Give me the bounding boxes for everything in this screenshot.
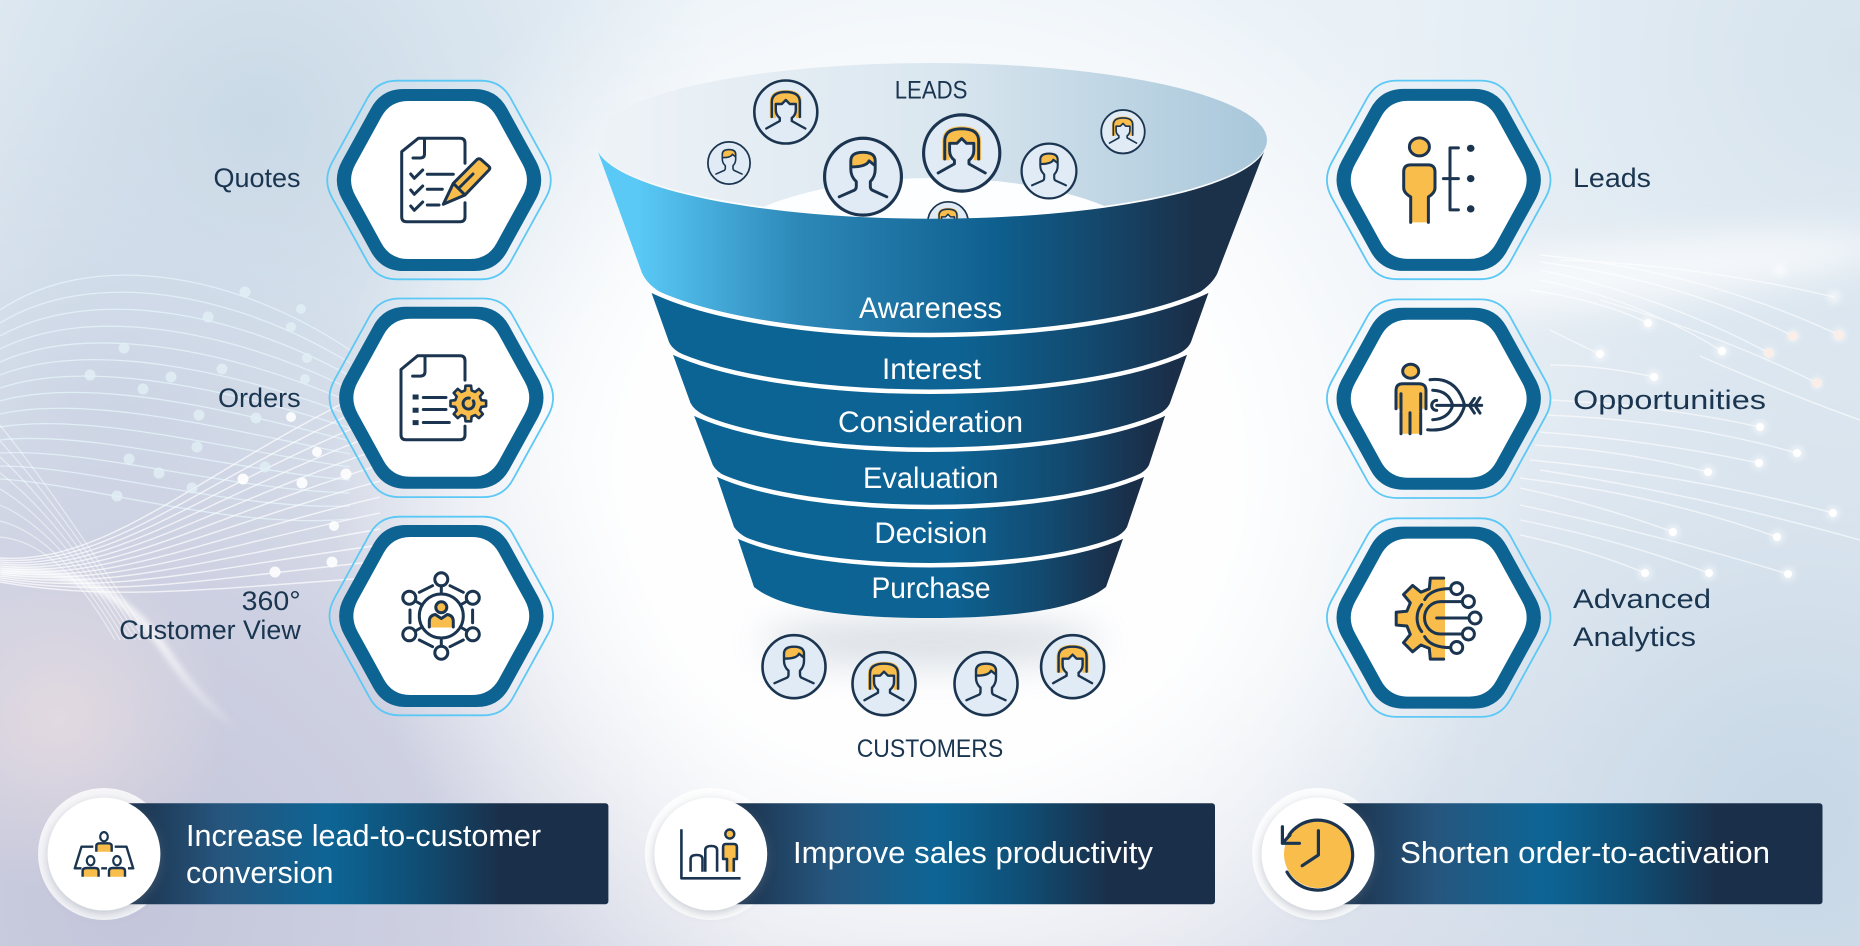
icon: gear with circuit	[1396, 578, 1481, 659]
label: 360 customer view	[119, 586, 301, 645]
customer avatars	[762, 635, 1104, 715]
label: Orders: Orders	[218, 383, 301, 413]
callout text	[186, 818, 541, 890]
label: Leads: Leads	[1573, 163, 1651, 193]
stage labels: Interest	[882, 353, 982, 386]
funnel band: evaluation	[693, 413, 1166, 508]
funnel band: decision	[716, 474, 1145, 566]
stage labels: Purchase	[872, 572, 990, 605]
icon: person with target	[1396, 364, 1482, 434]
callout: sales productivity	[645, 788, 1215, 920]
funnel band: consideration	[672, 352, 1188, 451]
callout text: Increase lead-to-customer	[186, 818, 541, 853]
icon: team at table	[75, 832, 133, 877]
icon: document with pencil	[402, 138, 490, 222]
lead avatars	[708, 80, 1145, 242]
label: Advanced Analytics: Analytics	[1573, 622, 1696, 652]
hexagon: 360 customer view	[330, 517, 553, 715]
stage labels: Decision	[874, 517, 987, 550]
callout text: Improve sales productivity	[793, 835, 1153, 870]
callout text: conversion	[186, 855, 334, 890]
funnel inner opening	[710, 178, 1160, 342]
funnel band: interest	[650, 290, 1210, 392]
label: 360 customer view: 360°	[242, 586, 301, 616]
icon: chart with person	[681, 829, 741, 878]
icon: person with list	[1404, 138, 1474, 222]
customers heading: CUSTOMERS	[857, 735, 1003, 763]
icon: customer network	[403, 573, 479, 659]
label: Advanced Analytics: Advanced	[1573, 584, 1711, 614]
icon: document with gear	[401, 356, 486, 440]
stage labels: Awareness	[859, 292, 1002, 325]
label: Opportunities: Opportunities	[1573, 385, 1766, 415]
leads heading: LEADS	[895, 77, 968, 105]
label: Quotes: Quotes	[214, 163, 300, 193]
callout: lead conversion	[38, 788, 608, 920]
hexagon: Quotes	[327, 81, 551, 279]
hexagon: Orders	[330, 298, 553, 497]
funnel shadow	[761, 616, 1101, 668]
hexagon: Opportunities	[1327, 299, 1550, 498]
funnel inner back surface	[595, 63, 1267, 217]
icon: clock	[1282, 820, 1353, 890]
callout text: Shorten order-to-activation	[1400, 835, 1770, 870]
funnel band: purchase	[737, 536, 1124, 618]
stage labels: Evaluation	[863, 462, 998, 495]
label: Advanced Analytics	[1573, 584, 1711, 652]
hexagon: Advanced Analytics	[1327, 518, 1550, 717]
label: 360 customer view: Customer View	[119, 615, 301, 645]
stage labels	[838, 292, 1023, 605]
panel: funnel	[595, 63, 1267, 618]
stage labels: Consideration	[838, 406, 1023, 439]
callout: order to activation	[1252, 788, 1822, 920]
hexagon: Leads	[1327, 81, 1550, 279]
funnel band: awareness	[598, 152, 1264, 336]
